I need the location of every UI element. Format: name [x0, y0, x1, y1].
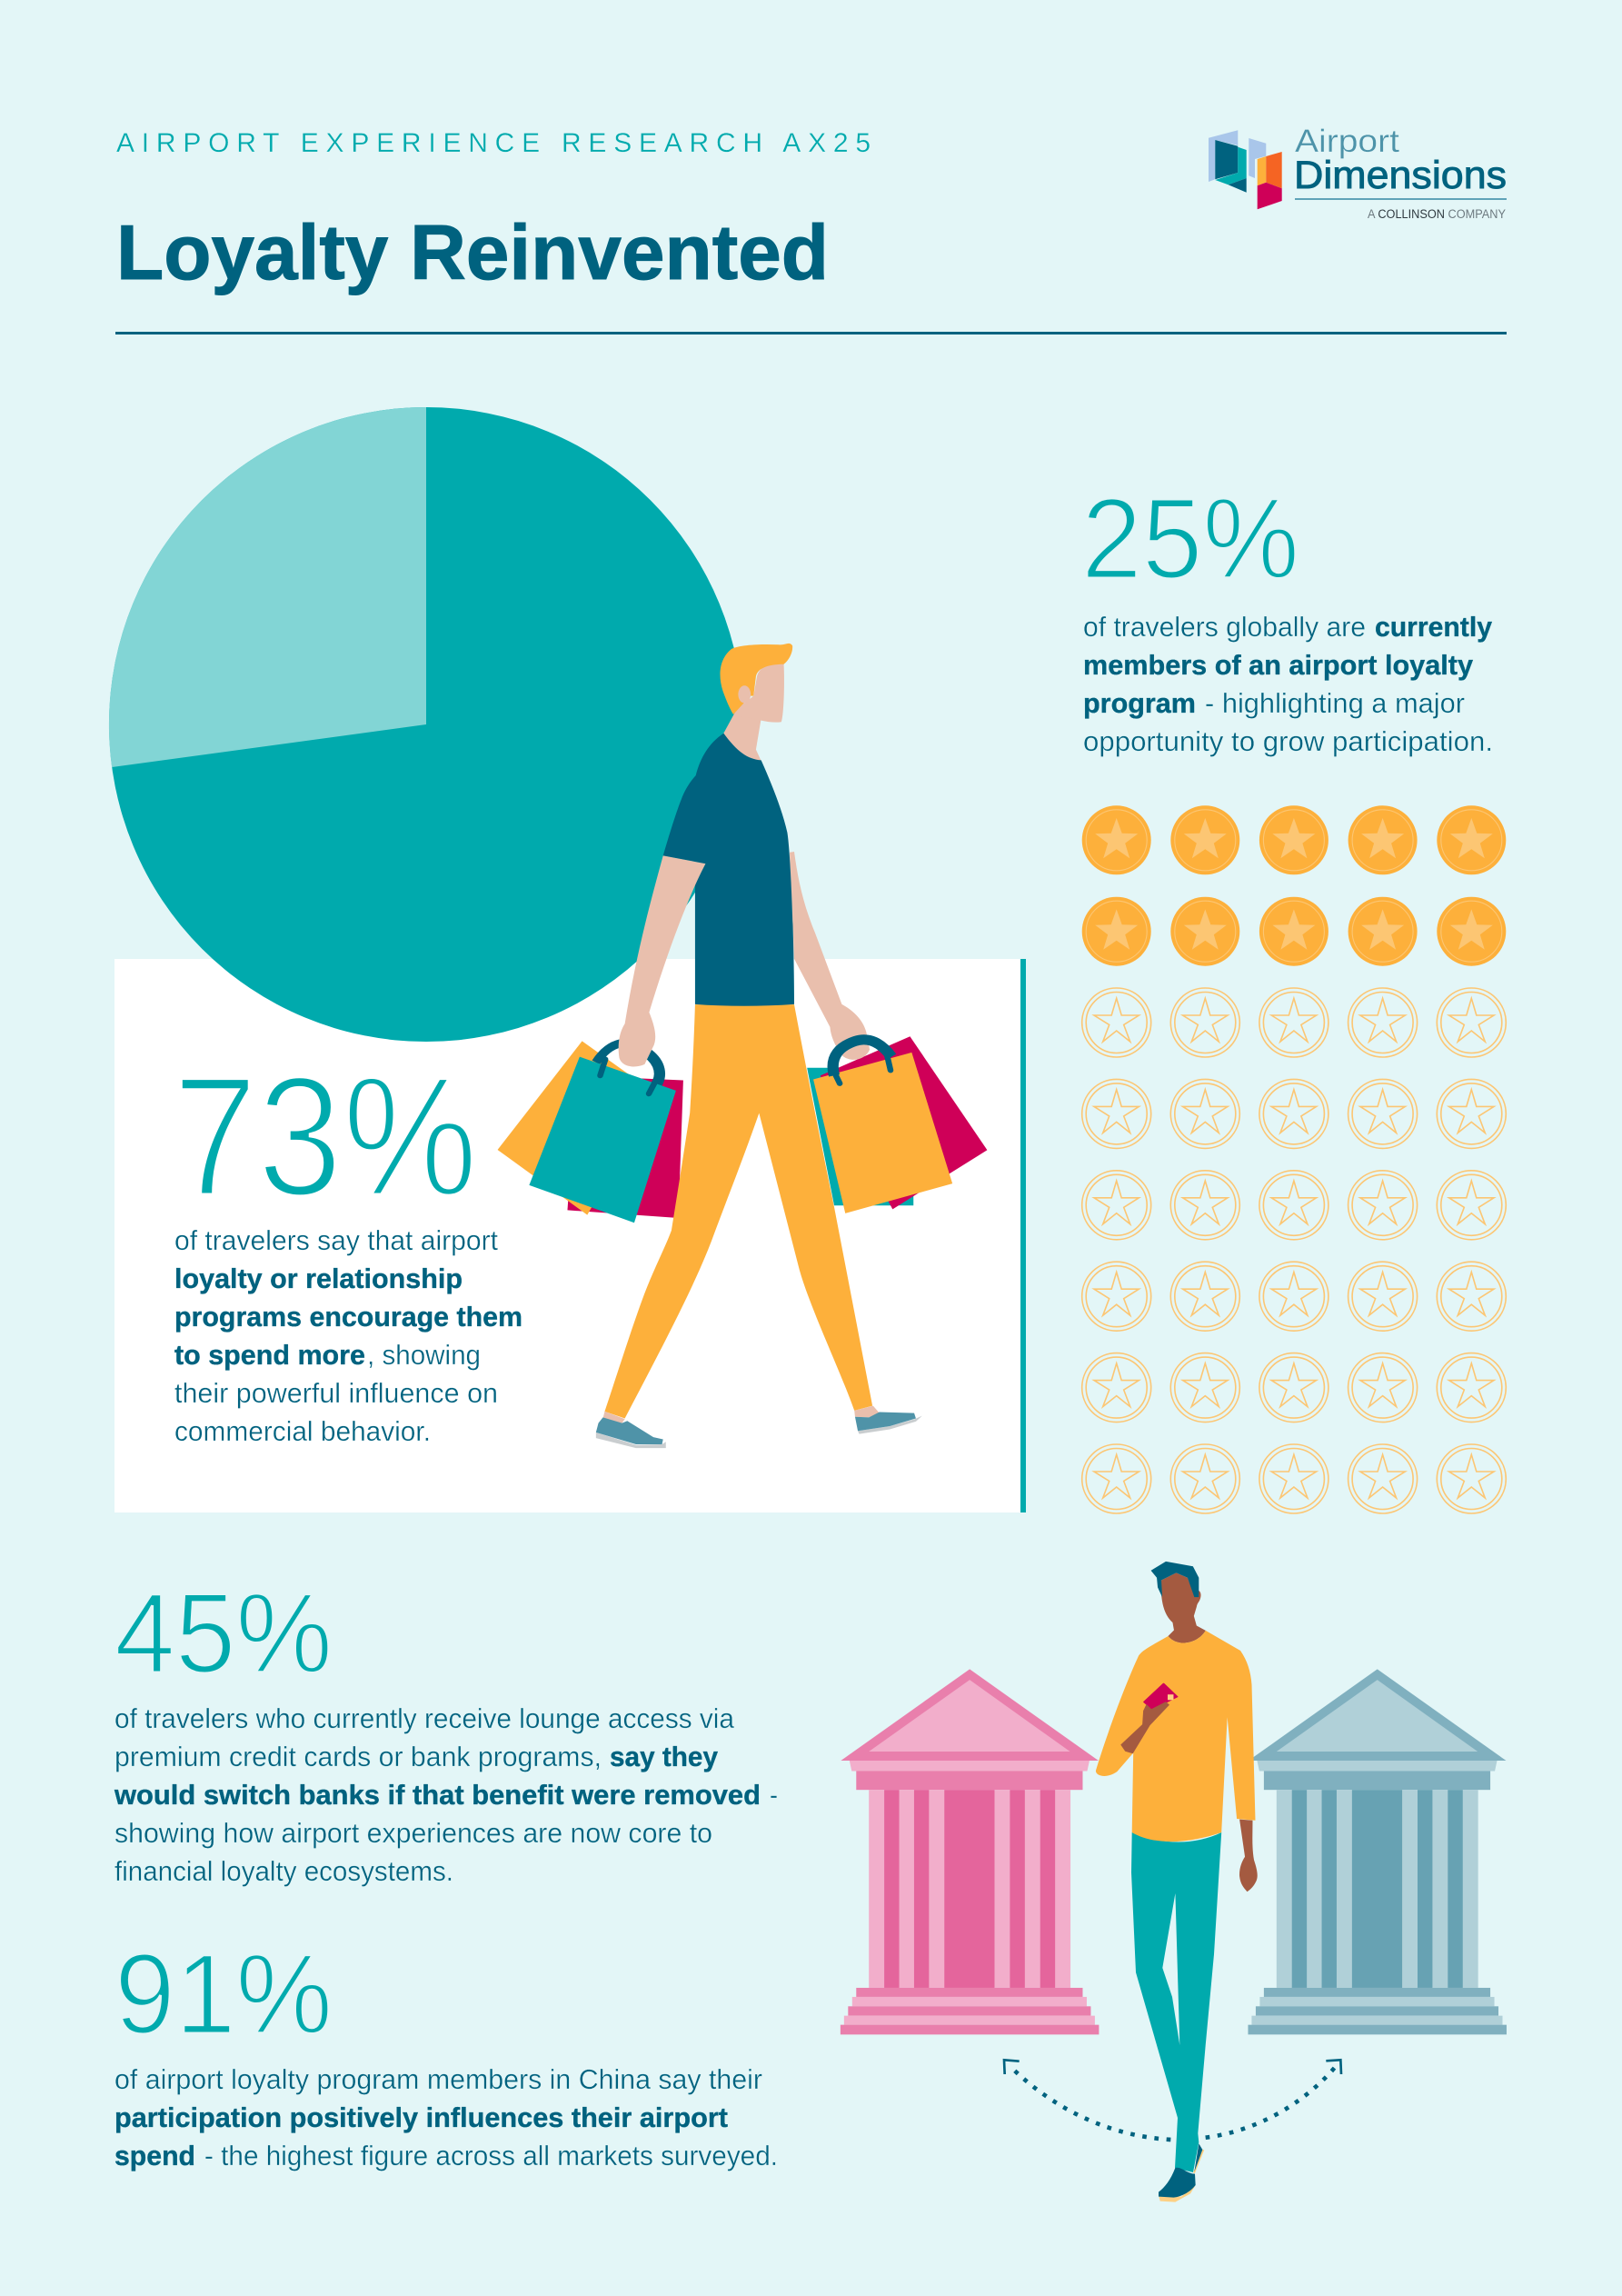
body text 73%: to spend more — [174, 1339, 365, 1371]
number 73%: 73% — [173, 1041, 478, 1232]
body text 45%: say they — [610, 1741, 719, 1772]
illustration: man with shopping bags — [498, 644, 987, 1448]
stat: 25% — [1081, 474, 1493, 757]
body text 45%: would switch banks if that benefit were removed — [114, 1779, 761, 1811]
body text 73%: their powerful influence on — [174, 1377, 498, 1409]
right front bag — [813, 1053, 952, 1213]
outline coins — [1082, 988, 1506, 1513]
icon: pink bank — [841, 1669, 1099, 2034]
body text 73%: commercial behavior. — [174, 1415, 431, 1447]
logo: Airport Dimensions: Airport — [1295, 124, 1399, 159]
right shopping bags — [807, 1036, 987, 1209]
body text 25%: of travelers globally are — [1083, 611, 1366, 643]
coin grid: 25 percent filled — [1082, 805, 1506, 1513]
body text 25%: - highlighting a major — [1205, 687, 1465, 719]
logo: Airport Dimensions: Dimensions — [1294, 154, 1507, 197]
body text 45%: of travelers who currently receive lounge access via — [114, 1702, 735, 1734]
logo: Airport Dimensions: A COLLINSON COMPANY — [1368, 207, 1506, 221]
body text 25%: program — [1083, 687, 1196, 719]
eyebrow heading: AIRPORT EXPERIENCE RESEARCH AX25 — [116, 128, 871, 158]
stat: 45% — [114, 1571, 778, 1887]
panel: 73% white card — [114, 959, 1026, 1512]
stat: 73% — [173, 1041, 522, 1447]
body text 73% — [174, 1224, 522, 1447]
number 25%: 25% — [1081, 474, 1299, 603]
right bag handle — [833, 1040, 891, 1083]
left shopping bags — [498, 1041, 683, 1223]
body text 25%: opportunity to grow participation. — [1083, 725, 1493, 757]
arrow: dotted arcs between banks — [1004, 2060, 1341, 2140]
torso, head and arms — [619, 644, 870, 1066]
body text 25%: members of an airport loyalty — [1083, 649, 1474, 681]
man with card — [1096, 1562, 1258, 2202]
upper body — [1096, 1562, 1258, 1892]
trousers — [596, 1004, 922, 1448]
body text 45%: premium credit cards or bank programs, — [114, 1741, 602, 1772]
pie chart: 73% — [109, 407, 743, 1042]
trousers — [1131, 1832, 1221, 2172]
number 91%: 91% — [114, 1932, 333, 2058]
body text 45% — [114, 1702, 778, 1887]
body text 73%: of travelers say that airport — [174, 1224, 498, 1256]
body text 45%: - — [770, 1779, 778, 1811]
stat: 91% — [114, 1932, 778, 2171]
body text 91% — [114, 2063, 778, 2171]
body text 73%: , showing — [367, 1339, 481, 1371]
shoes — [1159, 2143, 1203, 2202]
body text 91%: - the highest figure across all markets surveyed. — [204, 2140, 778, 2171]
body text 25%: currently — [1375, 611, 1493, 643]
body text 91%: spend — [114, 2140, 195, 2171]
body text 73%: loyalty or relationship — [174, 1263, 463, 1294]
logo: Airport Dimensions — [1209, 124, 1507, 221]
body text 25% — [1083, 611, 1493, 757]
illustration: banks and man with card — [841, 1562, 1507, 2202]
body text 45%: showing how airport experiences are now core to — [114, 1817, 712, 1849]
filled coins — [1082, 805, 1506, 966]
body text 91%: participation positively influences their airport — [114, 2101, 728, 2133]
body text 45%: financial loyalty ecosystems. — [114, 1855, 453, 1887]
title: Loyalty Reinvented — [116, 210, 829, 296]
body text 91%: of airport loyalty program members in China say their — [114, 2063, 762, 2095]
number 45%: 45% — [114, 1571, 333, 1697]
body text 73%: programs encourage them — [174, 1301, 522, 1333]
icon: blue bank — [1248, 1669, 1507, 2034]
